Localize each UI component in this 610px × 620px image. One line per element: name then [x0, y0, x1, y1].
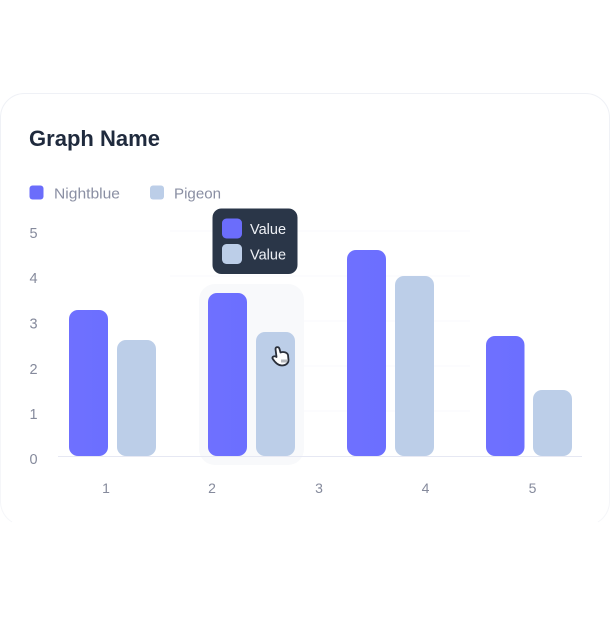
- y axis labels: 4: [30, 271, 38, 287]
- tooltip swatch: first value: [222, 218, 242, 238]
- legend swatch: Pigeon: [150, 186, 164, 200]
- heading: graph name: Graph Name: [29, 126, 160, 151]
- legend label: Pigeon: Pigeon: [174, 186, 221, 202]
- hover highlight on group 2: [199, 284, 304, 465]
- x axis labels: 3: [315, 480, 323, 496]
- y axis labels: [30, 226, 38, 468]
- panel: card outline: [0, 94, 610, 522]
- x axis labels: [102, 480, 537, 496]
- y axis labels: 0: [30, 452, 38, 468]
- bars group 4: [486, 336, 572, 456]
- tooltip: [212, 208, 298, 274]
- y axis labels: 2: [30, 362, 38, 378]
- bars group 1: [69, 310, 156, 456]
- icon: hand cursor: [272, 347, 288, 366]
- legend swatch: Nightblue: [30, 186, 44, 200]
- y axis labels: 1: [30, 407, 38, 423]
- x axis labels: 1: [102, 480, 110, 496]
- legend label: Nightblue: Nightblue: [54, 186, 120, 202]
- x axis labels: 4: [422, 480, 430, 496]
- x axis labels: 2: [208, 480, 216, 496]
- tooltip label: first value: Value: [250, 222, 286, 238]
- bars group 3: [347, 250, 434, 456]
- bars group 2: [208, 293, 295, 456]
- x axis line: [58, 456, 582, 458]
- tooltip label: second value: Value: [250, 248, 286, 264]
- y axis labels: 3: [30, 316, 38, 332]
- tooltip swatch: second value: [222, 244, 242, 264]
- x axis labels: 5: [529, 480, 537, 496]
- legend: [30, 186, 221, 202]
- y axis labels: 5: [30, 226, 38, 242]
